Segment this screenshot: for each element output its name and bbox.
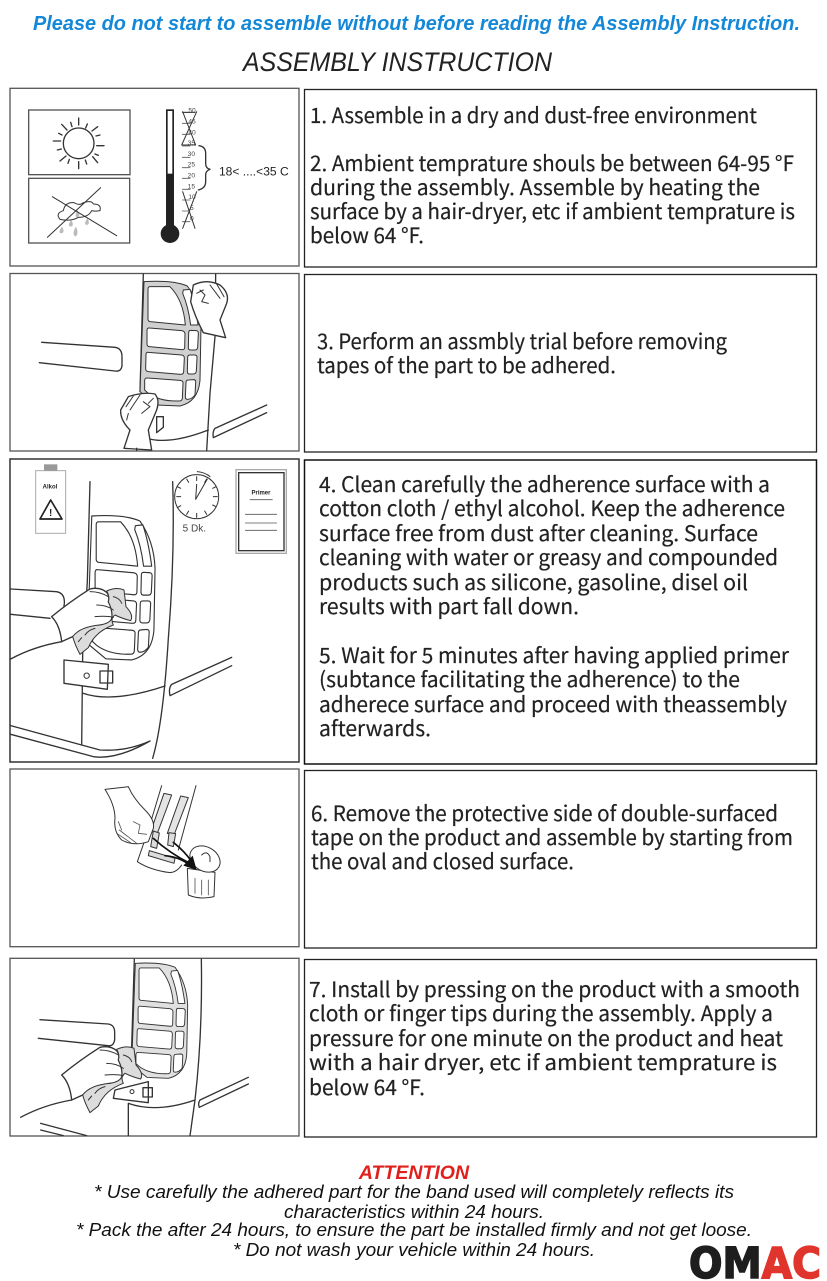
panel: pressing text: below 64 °F. xyxy=(309,1072,425,1102)
attention heading: ATTENTION xyxy=(358,1162,470,1184)
illustration: alcohol, clock, primer, cleaning hand xyxy=(11,464,286,758)
panel: cleaning and primer text: (subtance facilitating the adherence) to the xyxy=(319,664,740,694)
panel: pressing text: with a hair dryer, etc if ambient temprature is xyxy=(309,1047,777,1077)
illustration: sun, rain, thermometer: 10 xyxy=(188,194,196,201)
panel: tape removal text: tape on the product and assemble by starting from xyxy=(311,822,793,852)
illustration: sun, rain, thermometer: 18< ....<35 C xyxy=(219,164,289,178)
panel: environment text xyxy=(304,90,816,267)
panel: assembly trial text: 3. Perform an assmbly trial before removing xyxy=(317,326,727,356)
illustration: alcohol, clock, primer, cleaning hand: ! xyxy=(49,508,52,519)
panel: environment text: during the assembly. Assemble by heating the xyxy=(310,172,760,202)
panel: assembly trial illustration xyxy=(10,274,299,451)
panel: cleaning and primer text xyxy=(304,460,816,764)
panel: environment text: below 64 °F. xyxy=(310,220,424,250)
attention notes: * Use carefully the adhered part for the band used will completely reflects its xyxy=(94,1181,734,1202)
panel: tape removal text xyxy=(304,770,816,948)
attention notes xyxy=(76,1162,752,1260)
panel: cleaning and primer illustration xyxy=(10,459,299,762)
panel: environment text: surface by a hair-dryer, etc if ambient temprature is xyxy=(310,196,795,226)
attention notes: * Pack the after 24 hours, to ensure the part be installed firmly and not get loose. xyxy=(76,1219,752,1240)
illustration: sun, rain, thermometer xyxy=(29,107,289,243)
top notice: Please do not start to assemble without before reading the Assembly Instruction. xyxy=(33,12,800,35)
illustration: sun, rain, thermometer: 30 xyxy=(188,151,195,158)
panel: environment text: 1. Assemble in a dry and dust-free environment xyxy=(310,100,757,130)
panel: assembly trial text: tapes of the part to be adhered. xyxy=(317,350,616,380)
attention notes: characteristics within 24 hours. xyxy=(284,1201,544,1222)
panel: pressing text: cloth or finger tips during the assembly. Apply a xyxy=(309,998,773,1028)
panel: cleaning and primer text: 4. Clean carefully the adherence surface with a xyxy=(319,469,770,499)
illustration: sun, rain, thermometer: 5 xyxy=(190,205,194,212)
illustration: sun, rain, thermometer: 35 xyxy=(188,140,195,147)
panel: tape removal illustration xyxy=(10,769,299,947)
illustration: hands holding part on tail light xyxy=(39,274,267,451)
illustration: sun, rain, thermometer: 50 xyxy=(188,107,196,114)
panel: tape removal text: the oval and closed surface. xyxy=(311,846,574,876)
panel: cleaning and primer text: afterwards. xyxy=(319,713,431,743)
illustration: sun, rain, thermometer: 25 xyxy=(188,162,195,169)
attention notes: * Do not wash your vehicle within 24 hours. xyxy=(233,1239,595,1260)
panel: cleaning and primer text: adherece surface and proceed with theassembly xyxy=(319,689,787,719)
illustration: peeling tape into bin xyxy=(105,786,225,898)
illustration: alcohol, clock, primer, cleaning hand: 5 Dk. xyxy=(183,524,206,535)
illustration: alcohol, clock, primer, cleaning hand: Primer xyxy=(252,490,271,496)
panel: cleaning and primer text: results with part fall down. xyxy=(319,591,579,621)
illustration: hand pressing product xyxy=(21,959,248,1136)
illustration: sun, rain, thermometer: 15 xyxy=(188,183,195,190)
panel: cleaning and primer text: products such as silicone, gasoline, disel oil xyxy=(319,567,748,597)
illustration: sun, rain, thermometer: 20 xyxy=(188,172,195,179)
illustration: sun, rain, thermometer: 45 xyxy=(188,118,196,125)
title: ASSEMBLY INSTRUCTION xyxy=(241,47,552,77)
panel: assembly trial text xyxy=(304,274,816,452)
panel: pressing text: 7. Install by pressing on the product with a smooth xyxy=(309,974,800,1004)
illustration: alcohol, clock, primer, cleaning hand: Alkol xyxy=(43,485,58,491)
panel: tape removal text: 6. Remove the protective side of double-surfaced xyxy=(311,798,778,828)
panel: environment text: 2. Ambient temprature shouls be between 64-95 °F xyxy=(310,148,794,178)
panel: cleaning and primer text: cotton cloth / ethyl alcohol. Keep the adherence xyxy=(319,493,785,523)
panel: cleaning and primer text: 5. Wait for 5 minutes after having applied primer xyxy=(319,640,790,670)
panel: pressing illustration xyxy=(10,958,299,1136)
panel: environment illustration xyxy=(10,88,299,266)
panel: cleaning and primer text: surface free from dust after cleaning. Surface xyxy=(319,518,758,548)
illustration: sun, rain, thermometer: 0 xyxy=(190,216,194,223)
illustration: sun, rain, thermometer: 40 xyxy=(188,129,196,136)
panel: pressing text: pressure for one minute on the product and heat xyxy=(309,1023,783,1053)
panel: pressing text xyxy=(304,960,816,1137)
panel: cleaning and primer text: cleaning with water or greasy and compounded xyxy=(319,542,778,572)
